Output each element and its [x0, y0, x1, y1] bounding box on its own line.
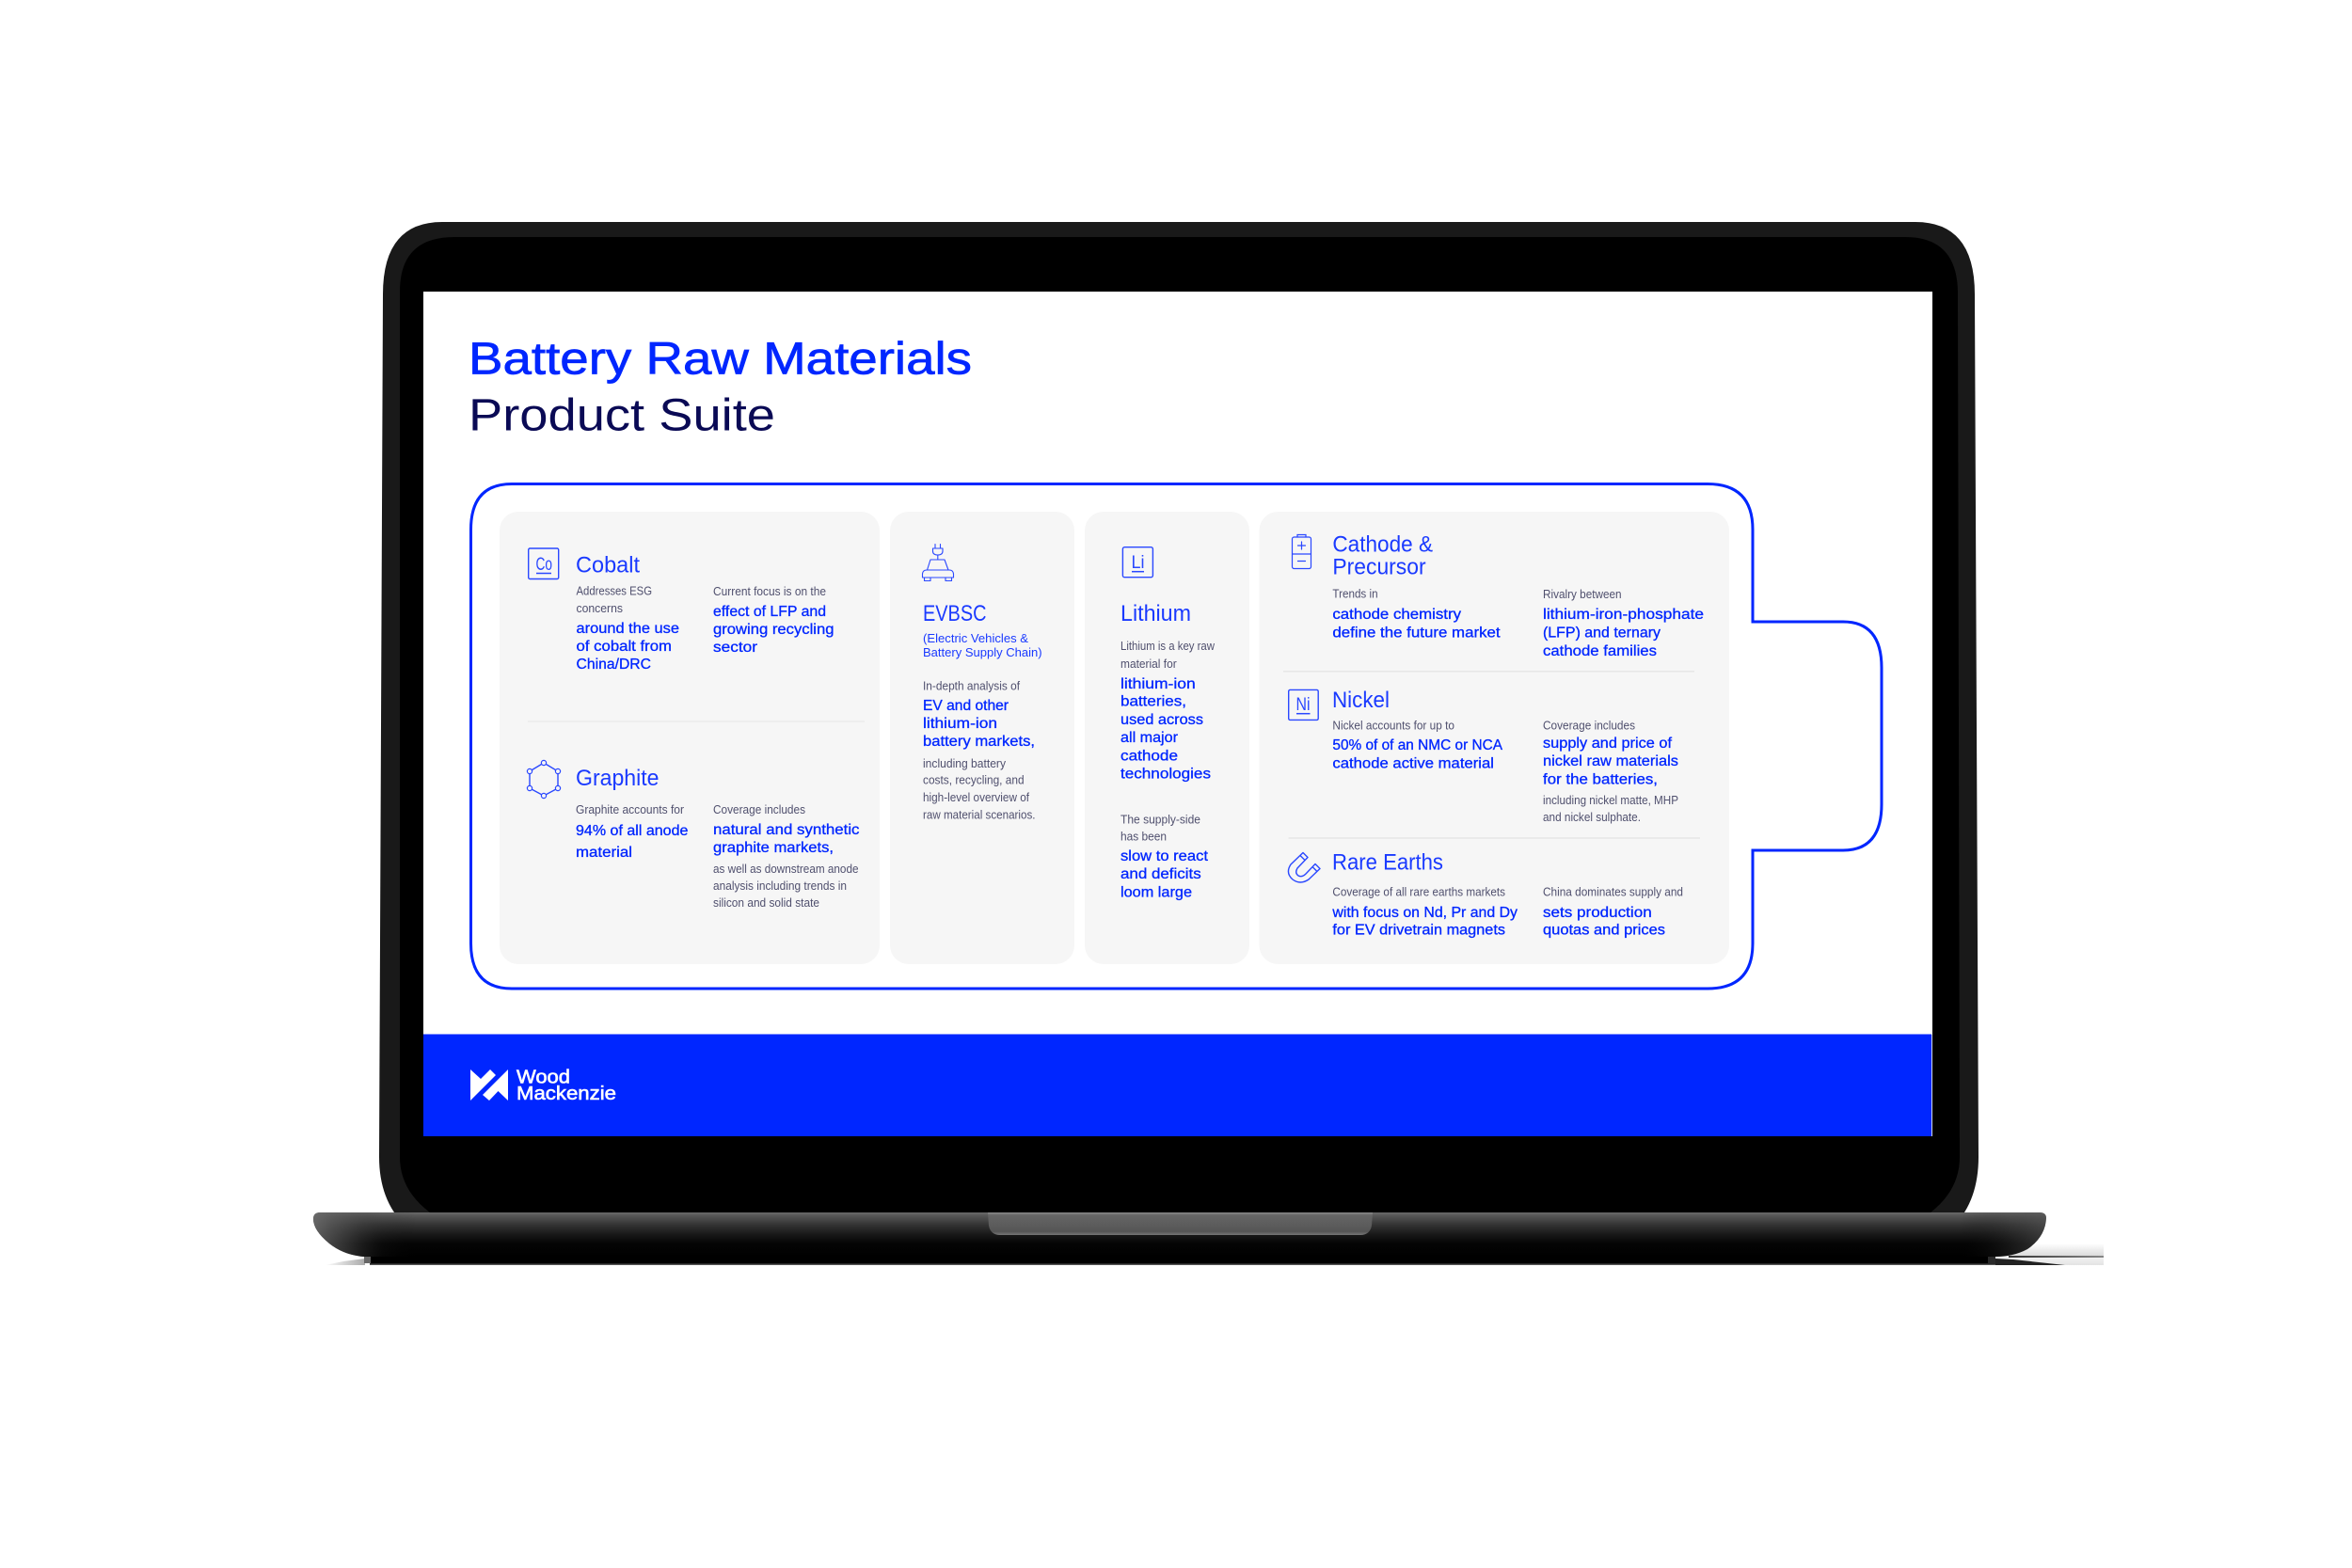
- text: lithium description: lithium-ion: [1120, 676, 1196, 692]
- heading: cathode and precursor: Precursor: [1332, 555, 1426, 580]
- panel: EVBSC: [890, 512, 1074, 964]
- text: rare earths left column: with focus on Nd, Pr and Dy: [1331, 905, 1518, 921]
- text: graphite left column: 94% of all anode: [576, 823, 688, 839]
- text: nickel left column: 50% of of an NMC or NCA: [1332, 737, 1503, 753]
- text: lithium description: technologies: [1120, 767, 1211, 783]
- text: lithium description: Lithium is a key raw: [1120, 640, 1216, 653]
- title: Battery Raw Materials: [469, 335, 972, 384]
- icon: lithium element: [1122, 547, 1152, 578]
- text: nickel right column: Coverage includes: [1543, 720, 1635, 733]
- text: EVBSC subtitle: (Electric Vehicles &: [923, 632, 1029, 645]
- heading: EVBSC: EVBSC: [923, 601, 986, 626]
- text: lithium description: cathode: [1120, 749, 1178, 765]
- text: cathode right column: (LFP) and ternary: [1543, 626, 1661, 641]
- text: graphite right column: silicon and solid state: [713, 896, 819, 910]
- text: EVBSC subtitle: [923, 632, 1042, 659]
- text: nickel right column: for the batteries,: [1543, 772, 1658, 788]
- text: cobalt left column: concerns: [576, 602, 623, 615]
- logo: Wood Mackenzie: [470, 1068, 616, 1104]
- icon: nickel element: [1289, 689, 1318, 720]
- laptop base: [313, 1212, 2046, 1265]
- logo wordmark: Wood: [516, 1068, 570, 1088]
- text: graphite right column: analysis including trends in: [713, 879, 847, 893]
- text: cobalt right column: sector: [713, 640, 757, 656]
- text: cathode right column: lithium-iron-phosphate: [1543, 607, 1704, 623]
- icon: battery: [1293, 534, 1311, 568]
- text: EVBSC description: including battery: [923, 757, 1007, 770]
- text: cathode left column: [1332, 588, 1501, 641]
- heading: cathode and precursor: [1332, 532, 1433, 580]
- text: graphite right column: as well as downstream anode: [713, 863, 859, 876]
- icon: cobalt element: [529, 548, 559, 579]
- text: lithium description: and deficits: [1120, 866, 1201, 882]
- text: lithium description: [1120, 640, 1216, 901]
- text: rare earths right column: sets production: [1543, 905, 1652, 921]
- heading: cathode and precursor: Cathode &: [1332, 532, 1433, 558]
- heading: graphite: Graphite: [576, 766, 659, 791]
- text: cobalt right column: growing recycling: [713, 622, 834, 638]
- text: nickel left column: [1332, 720, 1503, 772]
- text: cathode left column: cathode chemistry: [1332, 607, 1461, 623]
- icon: graphite hexagon: [527, 760, 561, 799]
- text: graphite left column: [576, 803, 688, 861]
- text: nickel right column: supply and price of: [1543, 736, 1673, 752]
- text: graphite right column: graphite markets,: [713, 840, 834, 856]
- laptop lid: [379, 222, 1979, 1212]
- text: cathode right column: Rivalry between: [1543, 588, 1622, 601]
- text: rare earths left column: Coverage of all rare earths markets: [1332, 886, 1505, 899]
- screen: [423, 292, 1932, 1136]
- text: cobalt left column: Addresses ESG: [576, 585, 652, 598]
- text: rare earths right column: quotas and prices: [1543, 923, 1665, 939]
- text: nickel right column: including nickel matte, MHP: [1543, 794, 1678, 807]
- text: EVBSC description: [923, 680, 1035, 822]
- text: lithium description: used across: [1120, 712, 1203, 728]
- text: EVBSC description: lithium-ion: [923, 716, 997, 732]
- laptop mockup: [313, 222, 2104, 1265]
- title: Product Suite: [469, 391, 775, 440]
- text: nickel left column: cathode active material: [1332, 756, 1494, 772]
- text: cathode right column: cathode families: [1543, 643, 1657, 659]
- text: cobalt left column: China/DRC: [576, 657, 651, 673]
- icon: magnet: [1288, 852, 1320, 882]
- heading: rare earths: Rare Earths: [1332, 850, 1443, 876]
- panel: cathode, nickel, rare earths: [1259, 512, 1729, 964]
- icon: electric vehicle with plug: [922, 544, 954, 581]
- laptop ground shadow: [325, 1243, 2104, 1265]
- text: EVBSC description: high-level overview of: [923, 791, 1029, 804]
- text: lithium description: loom large: [1120, 885, 1192, 901]
- text: EVBSC description: costs, recycling, and: [923, 774, 1025, 787]
- panel: lithium: [1085, 512, 1249, 964]
- text: EVBSC description: battery markets,: [923, 734, 1035, 750]
- text: cathode right column: [1543, 588, 1704, 659]
- logo wordmark: Mackenzie: [516, 1084, 616, 1104]
- heading: lithium: Lithium: [1120, 601, 1191, 626]
- text: graphite right column: [713, 803, 860, 910]
- icon: lithium element: Li: [1131, 553, 1144, 573]
- text: cobalt left column: [576, 585, 679, 673]
- text: nickel right column: nickel raw materials: [1543, 753, 1678, 769]
- text: lithium description: The supply-side: [1120, 813, 1200, 826]
- text: EVBSC description: In-depth analysis of: [923, 680, 1020, 693]
- icon: cobalt element: Co: [536, 555, 552, 575]
- text: cobalt left column: of cobalt from: [576, 639, 672, 655]
- battery outline: [470, 483, 1882, 989]
- text: rare earths right column: China dominates supply and: [1543, 886, 1683, 899]
- title: [469, 335, 972, 440]
- text: nickel right column: [1543, 720, 1678, 824]
- logo wordmark: [516, 1068, 616, 1104]
- text: EVBSC description: raw material scenarios.: [923, 809, 1035, 822]
- icon: logo mark: [470, 1069, 508, 1101]
- text: cobalt right column: [713, 585, 834, 656]
- heading: cobalt: Cobalt: [576, 553, 640, 578]
- text: nickel right column: and nickel sulphate.: [1543, 811, 1641, 824]
- heading: nickel: Nickel: [1332, 688, 1390, 713]
- text: cobalt left column: around the use: [576, 621, 679, 637]
- text: cathode left column: define the future market: [1332, 626, 1501, 641]
- icon: nickel element: Ni: [1296, 695, 1310, 715]
- text: cathode left column: Trends in: [1332, 588, 1378, 601]
- text: rare earths left column: [1331, 886, 1518, 939]
- text: rare earths right column: [1543, 886, 1683, 939]
- text: graphite right column: natural and synthetic: [713, 822, 860, 838]
- panel: cobalt and graphite: [500, 512, 880, 964]
- text: cobalt right column: Current focus is on the: [713, 585, 826, 598]
- text: graphite left column: Graphite accounts for: [576, 803, 684, 816]
- text: EVBSC subtitle: Battery Supply Chain): [923, 646, 1042, 659]
- text: EVBSC description: EV and other: [923, 698, 1009, 714]
- text: lithium description: material for: [1120, 657, 1177, 671]
- text: lithium description: all major: [1120, 730, 1178, 746]
- text: lithium description: slow to react: [1120, 848, 1209, 864]
- laptop hinge notch: [988, 1212, 1373, 1235]
- text: lithium description: batteries,: [1120, 694, 1186, 710]
- text: cobalt right column: effect of LFP and: [713, 604, 826, 620]
- text: graphite left column: material: [576, 845, 632, 861]
- text: lithium description: has been: [1120, 830, 1167, 843]
- text: graphite right column: Coverage includes: [713, 803, 805, 816]
- text: rare earths left column: for EV drivetrain magnets: [1332, 923, 1505, 939]
- text: nickel left column: Nickel accounts for up to: [1332, 720, 1454, 733]
